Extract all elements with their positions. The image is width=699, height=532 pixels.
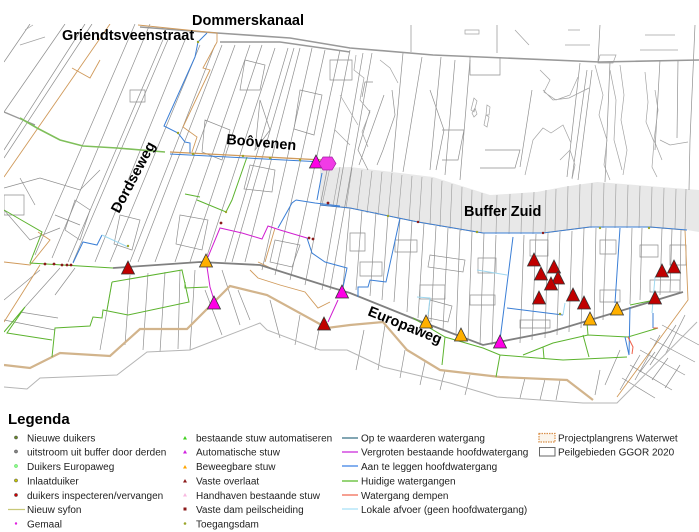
legend column 1: Gemaal bbox=[27, 520, 62, 530]
red filled-in watercourse bbox=[628, 328, 658, 354]
legend column 3: Aan te leggen hoofdwatergang bbox=[361, 462, 497, 473]
small dams bbox=[44, 202, 544, 266]
legend column 1 bbox=[8, 434, 166, 530]
legend column 2: Automatische stuw bbox=[196, 448, 281, 458]
place label: Boôvenen: Boôvenen bbox=[226, 132, 297, 154]
buffer parcel lines bbox=[322, 167, 686, 234]
orange triangles: beweegbare stuw bbox=[200, 254, 624, 341]
legend column 3: Op te waarderen watergang bbox=[361, 434, 485, 444]
area label: Buffer Zuid: Buffer Zuid bbox=[464, 204, 541, 220]
southeast grid detail bbox=[622, 325, 699, 398]
legend column 1: Nieuwe duikers bbox=[27, 434, 95, 444]
legend column 1: Nieuw syfon bbox=[27, 505, 81, 516]
parcel lines bbox=[4, 24, 699, 400]
buffer zone: Buffer Zuid bbox=[320, 167, 699, 233]
legend column 4: Peilgebieden GGOR 2020 bbox=[558, 448, 675, 458]
legend column 1: Duikers Europaweg bbox=[27, 462, 114, 473]
magenta triangles: automatische stuw bbox=[208, 155, 506, 348]
green watercourses bbox=[4, 118, 658, 377]
light blue local drainage bbox=[102, 235, 655, 315]
legend column 2: Toegangsdam bbox=[196, 520, 259, 530]
legend column 1: duikers inspecteren/vervangen bbox=[27, 491, 163, 502]
road label: Dordseweg: Dordseweg bbox=[108, 139, 159, 216]
legend column 2: Beweegbare stuw bbox=[196, 462, 276, 473]
legend column 1: Inlaatduiker bbox=[27, 476, 79, 488]
legend title: Legenda bbox=[8, 411, 70, 428]
white cover: top margin bbox=[0, 0, 699, 400]
road label: Griendtsveenstraat: Griendtsveenstraat bbox=[62, 28, 194, 44]
magenta enlarged watercourses bbox=[207, 226, 338, 322]
project boundary bbox=[4, 24, 688, 400]
blue watercourses bbox=[73, 33, 687, 355]
legend column 2: Vaste overlaat bbox=[196, 476, 259, 488]
legend column 2: Handhaven bestaande stuw bbox=[196, 491, 321, 502]
legend column 3 bbox=[342, 434, 528, 516]
legend column 4 bbox=[539, 434, 678, 458]
map south edge bbox=[4, 322, 697, 403]
Dommerskanaal road bbox=[140, 27, 699, 62]
legend column 3: Lokale afvoer (geen hoofdwatergang) bbox=[361, 505, 527, 516]
legend bbox=[8, 411, 678, 530]
legend column 3: Huidige watergangen bbox=[361, 476, 456, 488]
legend column 4: Projectplangrens Waterwet bbox=[558, 434, 678, 444]
road label: Europaweg: Europaweg bbox=[366, 304, 444, 348]
map bbox=[4, 24, 699, 403]
icon: gemaal hexagon bbox=[319, 157, 336, 170]
legend column 2: Vaste dam peilscheiding bbox=[196, 505, 304, 516]
legend column 2 bbox=[183, 434, 332, 530]
Europaweg road bbox=[113, 262, 683, 345]
legend column 3: Watergang dempen bbox=[361, 491, 448, 502]
road label: Dommerskanaal: Dommerskanaal bbox=[192, 13, 304, 29]
red triangles: vaste overlaat bbox=[122, 253, 680, 330]
legend column 3: Vergroten bestaande hoofdwatergang bbox=[361, 448, 528, 458]
wetland contours northeast bbox=[20, 25, 688, 180]
legend column 2: bestaande stuw automatiseren bbox=[196, 434, 332, 444]
legend column 1: uitstroom uit buffer door derden bbox=[27, 448, 166, 458]
